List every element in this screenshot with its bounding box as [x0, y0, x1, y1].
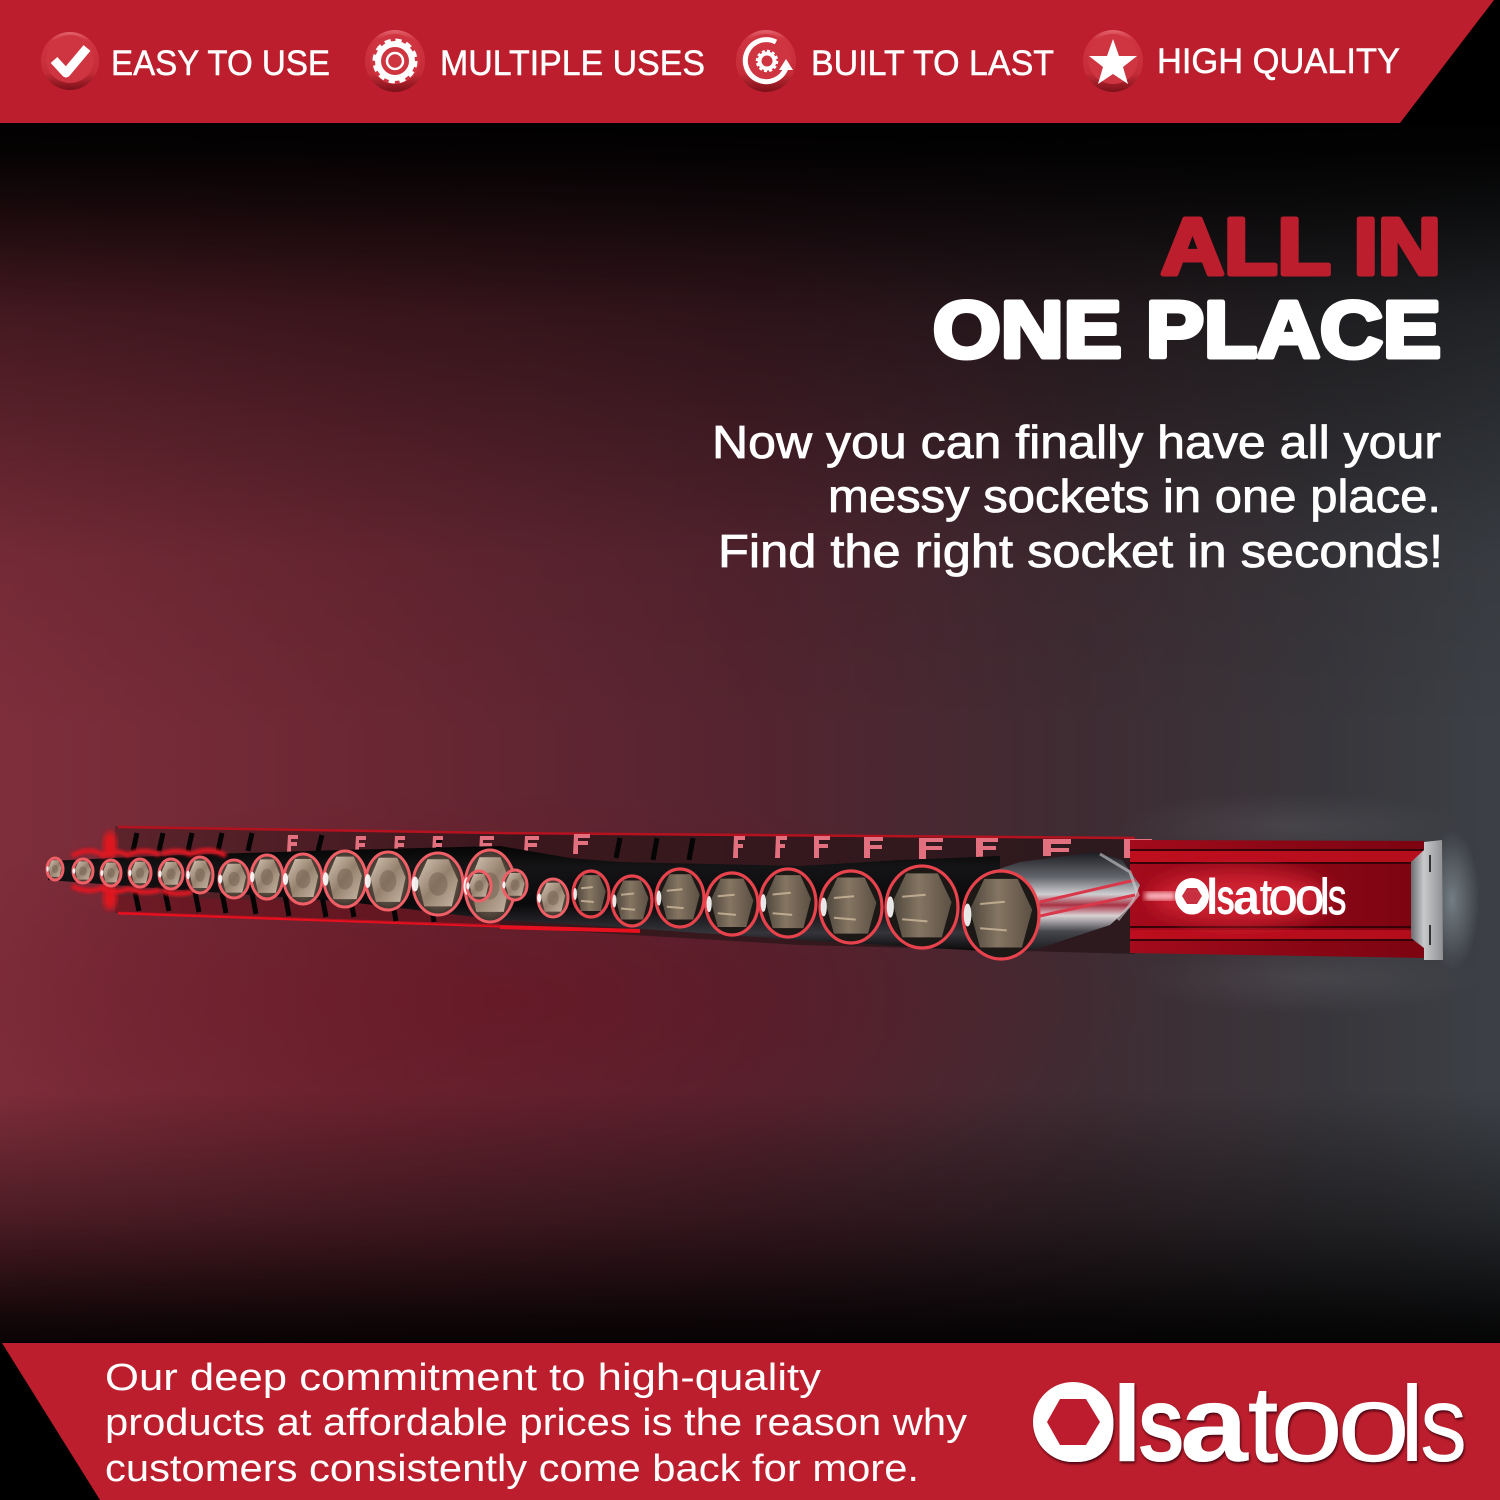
brand logo: Olsatools: o: [1270, 1361, 1343, 1485]
rail logo: [1175, 868, 1346, 926]
rail logo: t: [1260, 869, 1272, 925]
heading: all in one place: [933, 202, 1441, 374]
brand logo: Olsatools: t: [1248, 1363, 1278, 1484]
large socket body: [990, 852, 1140, 958]
rail logo: o: [1295, 868, 1324, 925]
feature: high quality: [1083, 30, 1400, 92]
feature: easy to use: [41, 32, 330, 90]
rail body: [103, 826, 1152, 954]
label: built to last: BUILT TO LAST: [811, 44, 1054, 83]
rail logo: l: [1206, 869, 1218, 925]
panel: bottom banner: [2, 1343, 1500, 1500]
upper clip marks: [287, 834, 1152, 859]
brand logo: Olsatools: [1033, 1361, 1467, 1485]
rail logo: s: [1328, 870, 1346, 925]
commitment statement: products at affordable prices is the reason why: [105, 1402, 967, 1444]
icon: gear button: [365, 30, 425, 92]
label: easy to use: EASY TO USE: [111, 44, 330, 83]
lower slots: [135, 892, 434, 922]
brand logo: Olsatools: s: [1137, 1363, 1185, 1484]
feature: built to last: [736, 30, 1054, 92]
brand logo: Olsatools: l: [1400, 1363, 1424, 1484]
commitment statement: customers consistently come back for more.: [105, 1448, 919, 1490]
end cap: [1411, 840, 1443, 960]
brand logo: Olsatools: o: [1337, 1361, 1410, 1485]
body text: sockets description: Now you can finally have all your: [712, 416, 1441, 468]
brand logo: Olsatools: l: [1112, 1363, 1142, 1484]
icon: star button: [1083, 30, 1143, 92]
brand logo: Olsatools: O: [1034, 1363, 1118, 1484]
product: socket organizer rail with sockets: [47, 826, 1443, 960]
rail logo: a: [1233, 870, 1261, 925]
rail logo: s: [1216, 870, 1235, 926]
brand logo: Olsatools: a: [1180, 1364, 1249, 1484]
brand logo: Olsatools: s: [1420, 1364, 1467, 1484]
rail logo: O: [1175, 869, 1209, 925]
red branded end panel: [1130, 840, 1424, 958]
rail logo: o: [1269, 868, 1298, 925]
heading: all in one place: ALL IN: [1161, 202, 1441, 291]
body text: sockets description: Find the right socket in seconds!: [718, 525, 1443, 577]
label: high quality: HIGH QUALITY: [1157, 42, 1400, 81]
icon: cycle gear button: [736, 30, 796, 92]
commitment statement: Our deep commitment to high-quality: [105, 1357, 821, 1399]
body text: sockets description: [712, 416, 1443, 577]
heading: all in one place: ONE PLACE: [933, 285, 1441, 374]
upper slots: [133, 833, 693, 860]
commitment statement: [105, 1357, 967, 1490]
feature: multiple uses: [365, 30, 705, 92]
socket bar: [48, 846, 1000, 952]
body text: sockets description: messy sockets in one place.: [828, 470, 1441, 522]
rail logo: l: [1320, 869, 1329, 925]
icon: check mark button: [41, 32, 99, 90]
red glints around small sockets: [72, 850, 226, 894]
label: multiple uses: MULTIPLE USES: [440, 44, 705, 83]
sockets row: [47, 850, 1039, 959]
panel: top feature banner: [0, 0, 1494, 123]
